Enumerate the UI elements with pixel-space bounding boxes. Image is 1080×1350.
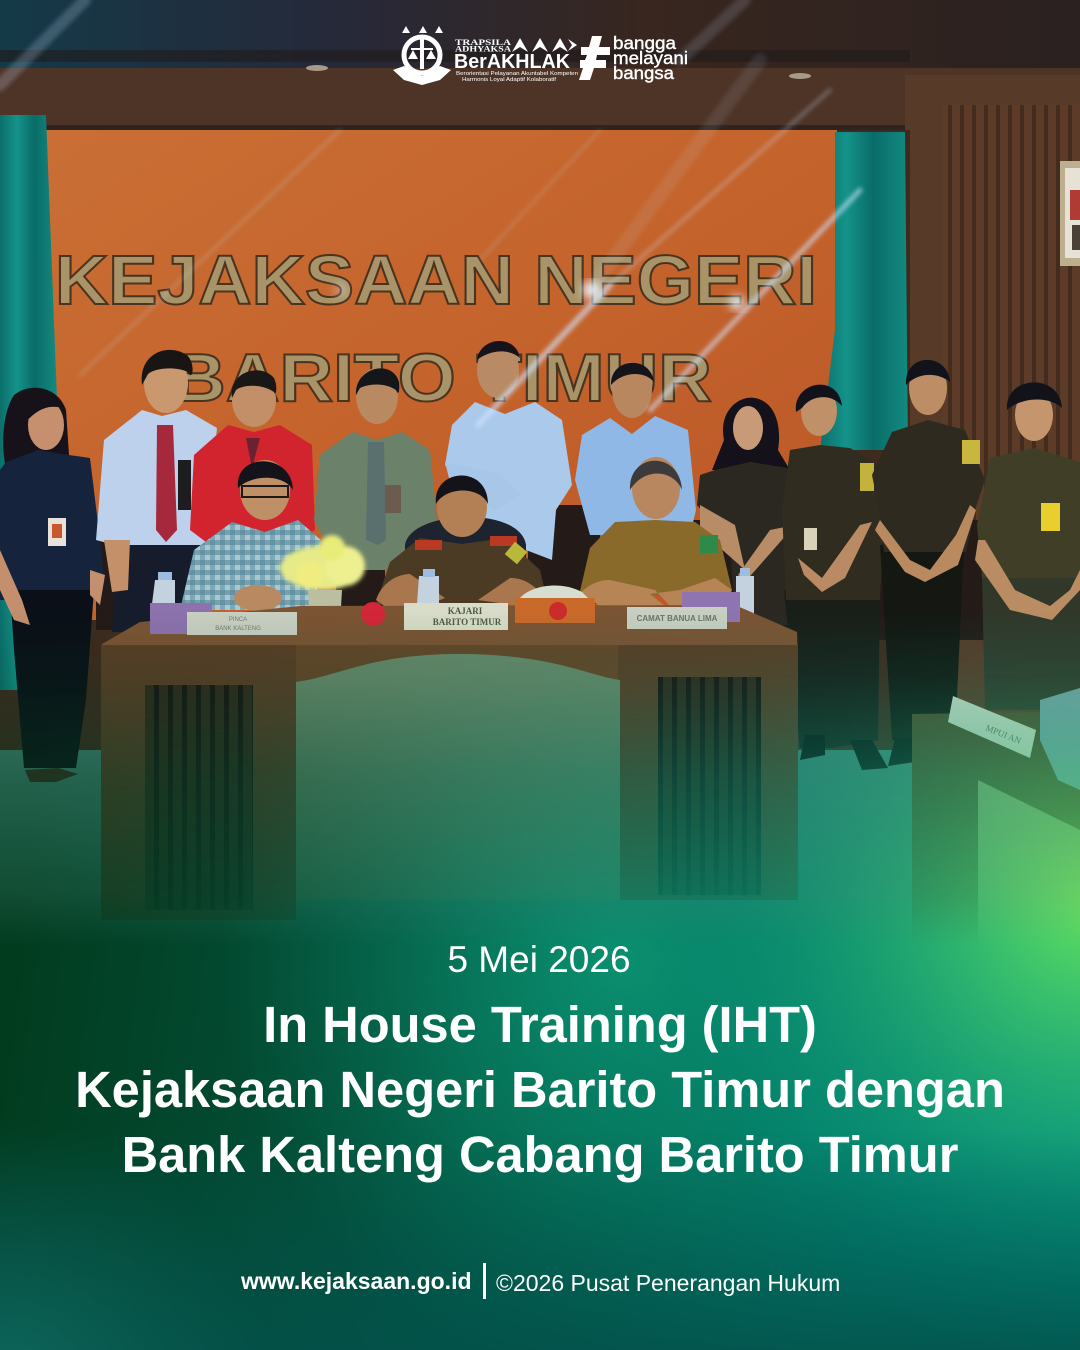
side desk — [912, 688, 1080, 1000]
person: uniform officer 3 with yellow badge — [975, 382, 1080, 710]
logo: bangga melayani bangsa: bangga — [613, 33, 676, 53]
seated people — [180, 457, 732, 611]
tissue box centre — [515, 585, 595, 623]
nameplate: Kajari Barito Timur: KAJARI — [448, 606, 483, 616]
nameplate: Kajari Barito Timur: BARITO TIMUR — [433, 617, 502, 627]
person: district head in khaki — [578, 457, 732, 606]
lens flare streaks — [0, 0, 860, 425]
room background — [0, 0, 1080, 950]
logo: Trapsila Adhyaksa BerAKHLAK: ADHYAKSA — [455, 44, 511, 54]
footer — [240, 1263, 840, 1299]
date: 5 Mei 2026 — [447, 939, 631, 980]
logo: prosecutor seal — [393, 26, 451, 85]
wall lettering: Barito Timur: BARITO TIMUR — [172, 340, 712, 416]
header logos — [393, 26, 688, 85]
website: www.kejaksaan.go.id — [241, 1268, 472, 1294]
title: In House Training (IHT) — [263, 996, 817, 1053]
nameplate: Camat Banua Lima: CAMAT BANUA LIMA — [637, 614, 718, 623]
logo: Trapsila Adhyaksa BerAKHLAK: Berorientasi Pelayanan Akuntabel Kompeten — [456, 71, 578, 77]
person: uniform officer 2 — [872, 360, 985, 766]
bottles, flowers and table items — [152, 535, 754, 624]
nameplate: Camat Banua Lima — [627, 607, 727, 629]
dark lower wall behind people — [96, 505, 1000, 640]
person: woman in uniform — [697, 398, 806, 625]
person: prosecutor head with chair — [376, 475, 548, 606]
side desk: MPUI AN — [984, 723, 1023, 746]
logo: Trapsila Adhyaksa BerAKHLAK: TRAPSILA — [455, 37, 512, 47]
tissue box left — [150, 603, 212, 634]
wall lettering: Kejaksaan Negeri: KEJAKSAAN NEGERI — [55, 241, 817, 319]
nameplate: Pinca Bank Kalteng: PINCA — [229, 617, 247, 623]
logo: Trapsila Adhyaksa BerAKHLAK — [454, 37, 578, 83]
person: man in red shirt — [190, 370, 315, 545]
nameplate: Pinca Bank Kalteng — [187, 612, 297, 635]
tissue box right — [682, 592, 740, 622]
person: man in light blue shirt — [445, 341, 572, 560]
framed picture — [1060, 161, 1080, 266]
person: uniform officer 1 — [782, 385, 888, 770]
person: man in check shirt — [180, 460, 330, 611]
curtain left — [0, 115, 57, 690]
logo: bangga melayani bangsa: melayani — [613, 48, 688, 68]
conference desk — [101, 605, 798, 920]
orange wall panel — [45, 130, 837, 620]
water bottles — [152, 568, 754, 620]
standing people — [0, 341, 1080, 782]
person: man in green shirt and grey tie — [314, 368, 437, 570]
logo: Trapsila Adhyaksa BerAKHLAK: BerAKHLAK — [454, 51, 571, 73]
logo: bangga melayani bangsa — [579, 33, 688, 83]
title — [75, 996, 1005, 1183]
logo: bangga melayani bangsa: bangsa — [613, 63, 674, 83]
lens flare sparkles — [335, 281, 744, 310]
title: Bank Kalteng Cabang Barito Timur — [122, 1126, 958, 1183]
red ball — [361, 602, 385, 626]
flower bouquet — [280, 535, 365, 590]
person: woman in navy blazer — [0, 388, 105, 782]
curtain middle — [820, 132, 908, 450]
copyright: ©2026 Pusat Penerangan Hukum — [496, 1270, 840, 1296]
flower vase — [308, 590, 342, 624]
title: Kejaksaan Negeri Barito Timur dengan — [75, 1061, 1005, 1118]
nameplate: Kajari Barito Timur — [404, 603, 508, 630]
divider — [483, 1263, 486, 1299]
logo: Trapsila Adhyaksa BerAKHLAK: Harmonis Loyal Adaptif Kolaboratif — [462, 77, 557, 83]
person: man in blue shirt and red tie — [96, 350, 217, 632]
nameplate: Pinca Bank Kalteng: BANK KALTENG — [215, 626, 261, 632]
green gradient overlay — [0, 600, 1080, 1350]
person: man in blue shirt right — [575, 362, 696, 535]
